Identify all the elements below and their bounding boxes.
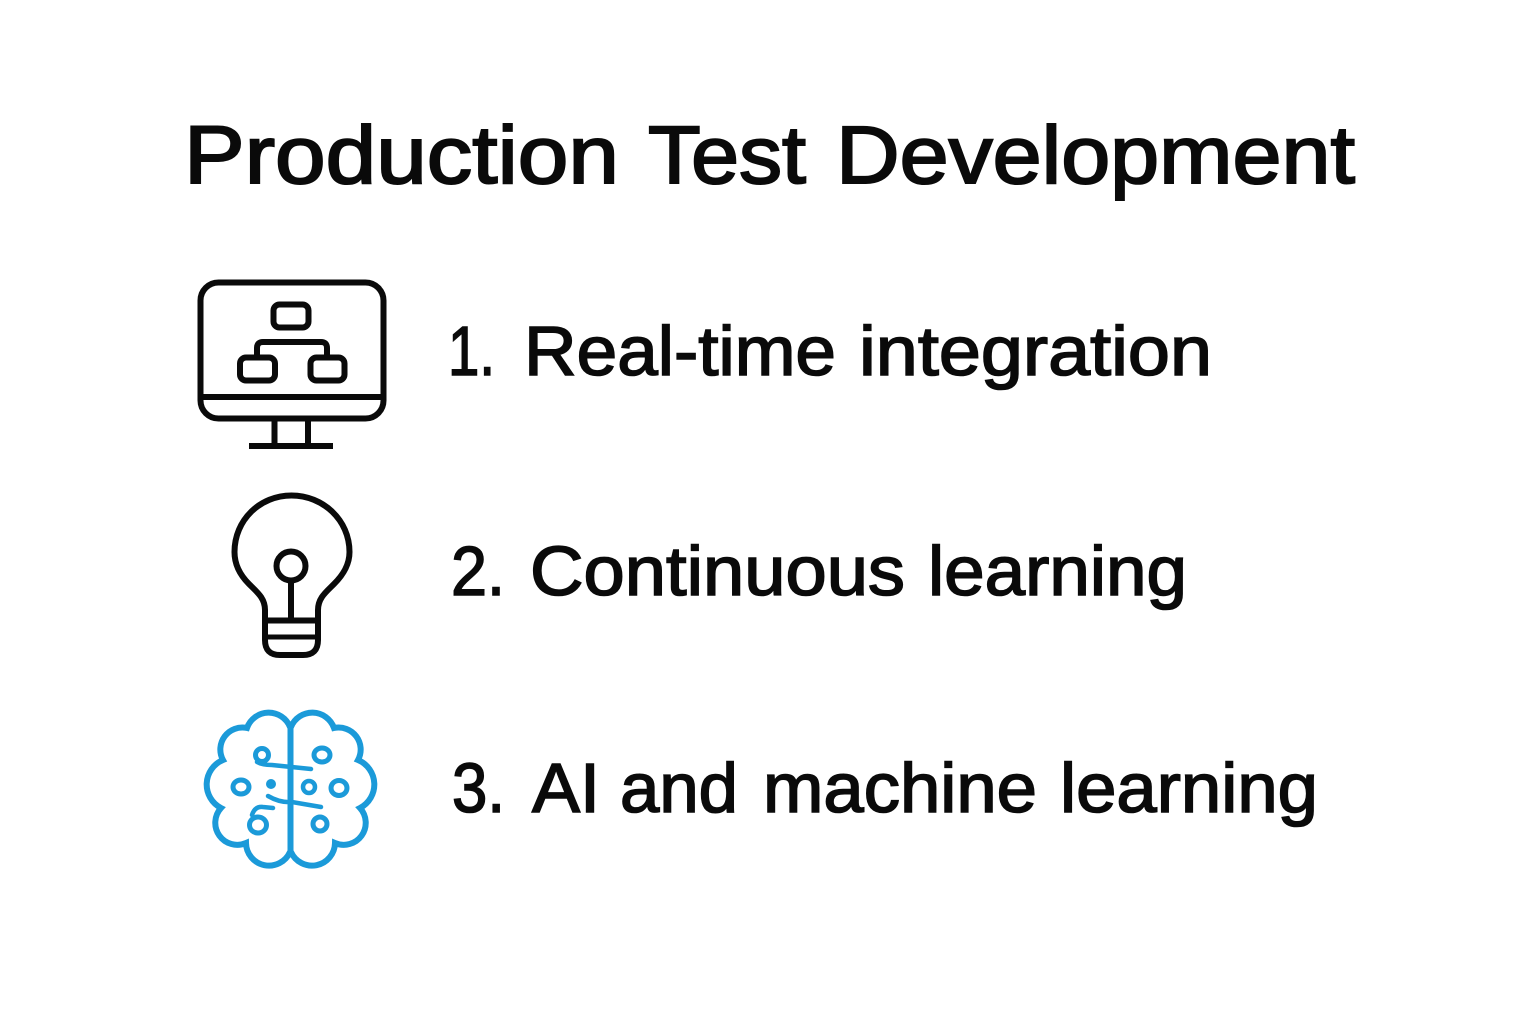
item 1 text: Real-time bbox=[524, 312, 836, 390]
item 2 text bbox=[451, 532, 1187, 610]
item 1 text: 1. bbox=[448, 312, 495, 390]
item 3 text: AI bbox=[532, 749, 600, 827]
item 3 text: 3. bbox=[452, 749, 505, 827]
title: Test bbox=[648, 110, 806, 201]
icon: AI brain bbox=[207, 713, 374, 866]
icon: light bulb bbox=[234, 496, 350, 655]
item 2 text: 2. bbox=[451, 532, 505, 610]
title bbox=[184, 110, 1355, 201]
item 1 text bbox=[448, 312, 1212, 390]
item 3 text: learning bbox=[1060, 749, 1318, 827]
item 3 text: machine bbox=[763, 749, 1037, 827]
icon: computer monitor with hierarchy bbox=[200, 282, 384, 446]
item 3 text: and bbox=[620, 749, 738, 827]
title: Production bbox=[184, 110, 619, 201]
title: Development bbox=[836, 110, 1355, 201]
item 2 text: Continuous bbox=[530, 532, 905, 610]
item 1 text: integration bbox=[859, 312, 1212, 390]
item 2 text: learning bbox=[928, 532, 1187, 610]
item 3 text bbox=[452, 749, 1318, 827]
